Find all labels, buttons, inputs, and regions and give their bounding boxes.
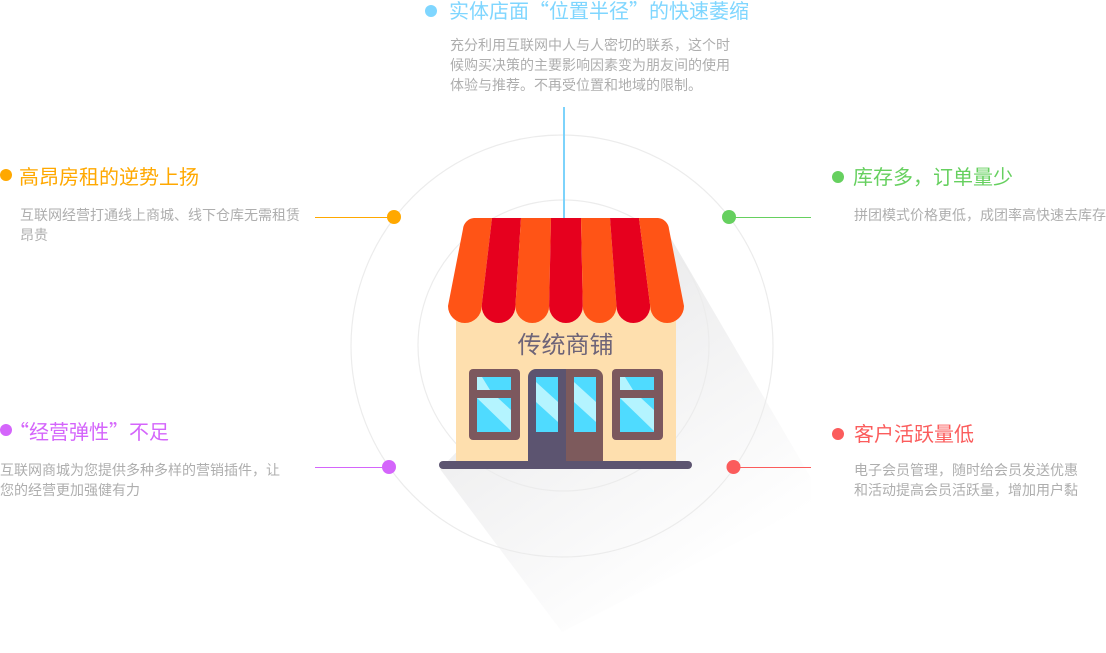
bullet: flexibility — [0, 424, 12, 436]
store illustration — [439, 218, 692, 469]
connector: inventory — [722, 210, 811, 224]
callout: physical store radius — [449, 0, 749, 93]
bullet: rent — [0, 169, 12, 181]
heading: 客户活跃量低 — [854, 418, 974, 447]
description — [0, 462, 280, 498]
heading: 库存多，订单量少 — [853, 161, 1013, 190]
store sign: 传统商铺 — [518, 332, 614, 359]
bullet: inventory — [832, 171, 844, 183]
long shadow — [440, 235, 811, 632]
description: 和活动提高会员活跃量，增加用户黏 — [854, 482, 1078, 498]
connector: top — [563, 107, 565, 218]
callout: high rent — [19, 161, 300, 243]
description: 昂贵 — [20, 227, 48, 243]
connector: customer activity — [726, 460, 811, 474]
left window — [469, 369, 520, 440]
callout: flexibility — [0, 416, 280, 498]
store wall — [456, 300, 676, 462]
description — [20, 207, 300, 243]
description: 拼团模式价格更低，成团率高快速去库存 — [854, 207, 1106, 223]
inner circle — [418, 200, 709, 491]
callout: inventory — [853, 161, 1106, 223]
outer circle — [351, 135, 773, 557]
bullet: customer activity — [832, 428, 844, 440]
heading: “经营弹性”不足 — [9, 416, 169, 445]
description: 充分利用互联网中人与人密切的联系，这个时 — [450, 37, 730, 53]
description — [854, 462, 1078, 498]
description: 候购买决策的主要影响因素变为朋友间的使用 — [450, 57, 730, 73]
description: 体验与推荐。不再受位置和地域的限制。 — [450, 77, 702, 93]
description: 互联网经营打通线上商城、线下仓库无需租赁 — [20, 207, 300, 223]
connector: rent — [315, 210, 401, 224]
callout: customer activity — [854, 418, 1078, 498]
base bar — [439, 461, 692, 469]
right window — [612, 369, 663, 440]
description: 互联网商城为您提供多种多样的营销插件，让 — [0, 462, 280, 478]
description: 您的经营更加强健有力 — [0, 482, 140, 498]
bullet: top — [425, 5, 437, 17]
description: 电子会员管理，随时给会员发送优惠 — [854, 462, 1078, 478]
connector: flexibility — [315, 460, 396, 474]
heading: 高昂房租的逆势上扬 — [19, 161, 199, 190]
door — [528, 369, 603, 461]
awning — [448, 218, 684, 323]
description — [450, 37, 730, 93]
